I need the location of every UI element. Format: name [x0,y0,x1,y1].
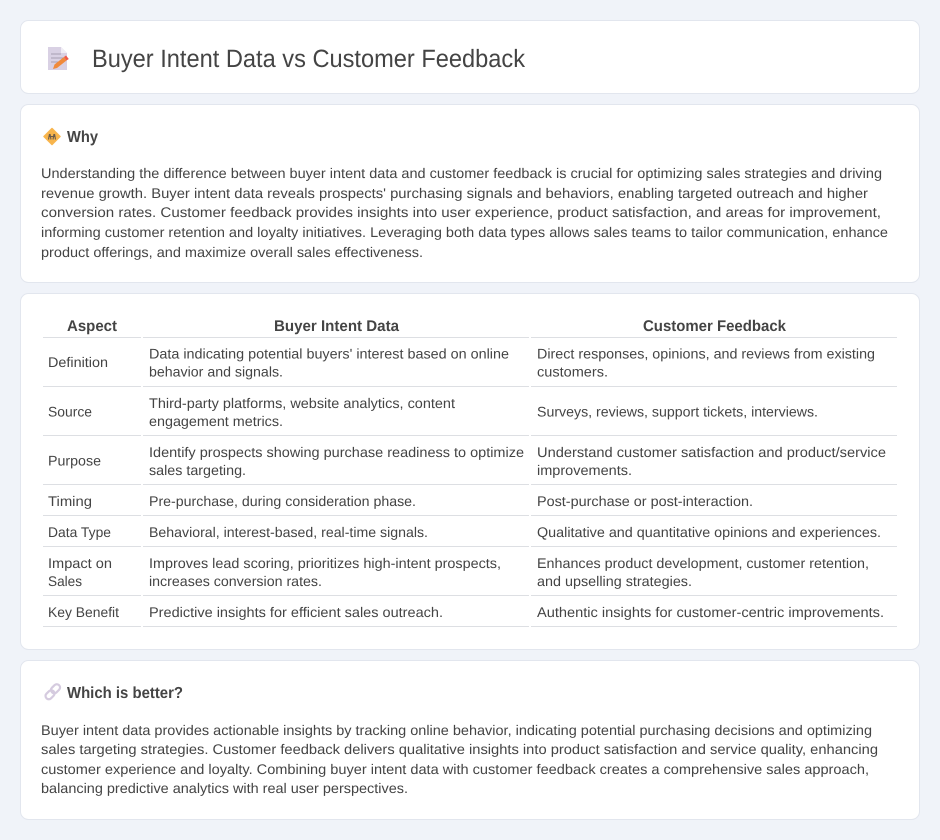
text block: verdict: customer experience and loyalty. Combining buyer intent data with customer feedback creates a comprehensive sales approach, [41,761,869,777]
text block: why explanation: Understanding the difference between buyer intent data and customer feedback is crucial for optimizing sales strategies and driving [41,165,882,181]
row: purpose: Purpose [48,452,101,468]
heading: why: Why [67,129,98,146]
row: impact on sales: Enhances product development, customer retention, [537,555,869,571]
row: definition: behavior and signals. [149,364,283,380]
icon: chain link [44,683,61,701]
text block: why explanation: revenue growth. Buyer intent data reveals prospects' purchasing signals and behaviors, enabling targeted outreach and higher [41,185,868,201]
row: data type: Data Type [48,524,111,540]
icon: warning diamond [44,128,60,144]
row: impact on sales: increases conversion rates. [149,573,322,589]
row: definition [48,346,875,380]
row: impact on sales: and upselling strategies. [537,573,692,589]
panel: which is better [20,660,920,820]
row: impact on sales: Sales [48,573,82,589]
row: data type [48,524,881,540]
row: definition: customers. [537,364,608,380]
text block: why explanation: conversion rates. Customer feedback provides insights into user experience, product satisfaction, and areas for improvement, [41,204,881,220]
row: source: Third-party platforms, website analytics, content [149,395,455,411]
heading: which is better: Which is better? [67,685,183,702]
row: purpose: Identify prospects showing purchase readiness to optimize [149,444,524,460]
row: impact on sales: Improves lead scoring, prioritizes high-intent prospects, [149,555,501,571]
row: definition: Data indicating potential buyers' interest based on online [149,346,509,362]
row: source: engagement metrics. [149,413,283,429]
table header: Aspect [67,318,117,335]
row: data type: Qualitative and quantitative opinions and experiences. [537,524,881,540]
row: impact on sales [48,555,869,589]
text block: verdict [41,722,878,796]
row: key benefit: Authentic insights for customer-centric improvements. [537,604,884,620]
row: purpose [48,444,886,478]
row: purpose: improvements. [537,462,632,478]
row: impact on sales: Impact on [48,555,112,571]
panel: comparison table [20,294,920,650]
icon: document with pencil [48,47,69,70]
row: definition: Direct responses, opinions, and reviews from existing [537,346,875,362]
row: data type: Behavioral, interest-based, real-time signals. [149,524,428,540]
text block: verdict: Buyer intent data provides actionable insights by tracking online behavior, indicating potential purchasing decisions and optimizing [41,722,872,738]
row: timing: Timing [48,493,92,509]
panel: title [20,20,920,94]
row: timing: Pre-purchase, during consideration phase. [149,493,416,509]
row: key benefit [48,604,884,620]
row: key benefit: Predictive insights for efficient sales outreach. [149,604,443,620]
row: source: Surveys, reviews, support tickets, interviews. [537,404,818,420]
row: key benefit: Key Benefit [48,604,119,620]
row: timing [48,493,753,509]
row: timing: Post-purchase or post-interaction. [537,493,753,509]
row: purpose: Understand customer satisfaction and product/service [537,444,886,460]
text block: why explanation: product offerings, and maximize overall sales effectiveness. [41,244,423,260]
text block: why explanation: informing customer retention and loyalty initiatives. Leveraging both data types allows sales teams to tailor communication, enhance [41,224,888,240]
text block: why explanation [41,165,888,260]
row: source: Source [48,404,92,420]
table header: Customer Feedback [643,318,786,335]
table header [67,318,786,335]
panel: why [20,104,920,282]
row: purpose: sales targeting. [149,462,246,478]
text block: verdict: sales targeting strategies. Customer feedback delivers qualitative insights into product satisfaction and service quality, enhancing [41,741,878,757]
row: definition: Definition [48,354,108,370]
text block: verdict: balancing predictive analytics with real user perspectives. [41,780,408,796]
row: source [48,395,818,429]
title text: Buyer Intent Data vs Customer Feedback [92,45,525,73]
table header: Buyer Intent Data [274,318,399,335]
